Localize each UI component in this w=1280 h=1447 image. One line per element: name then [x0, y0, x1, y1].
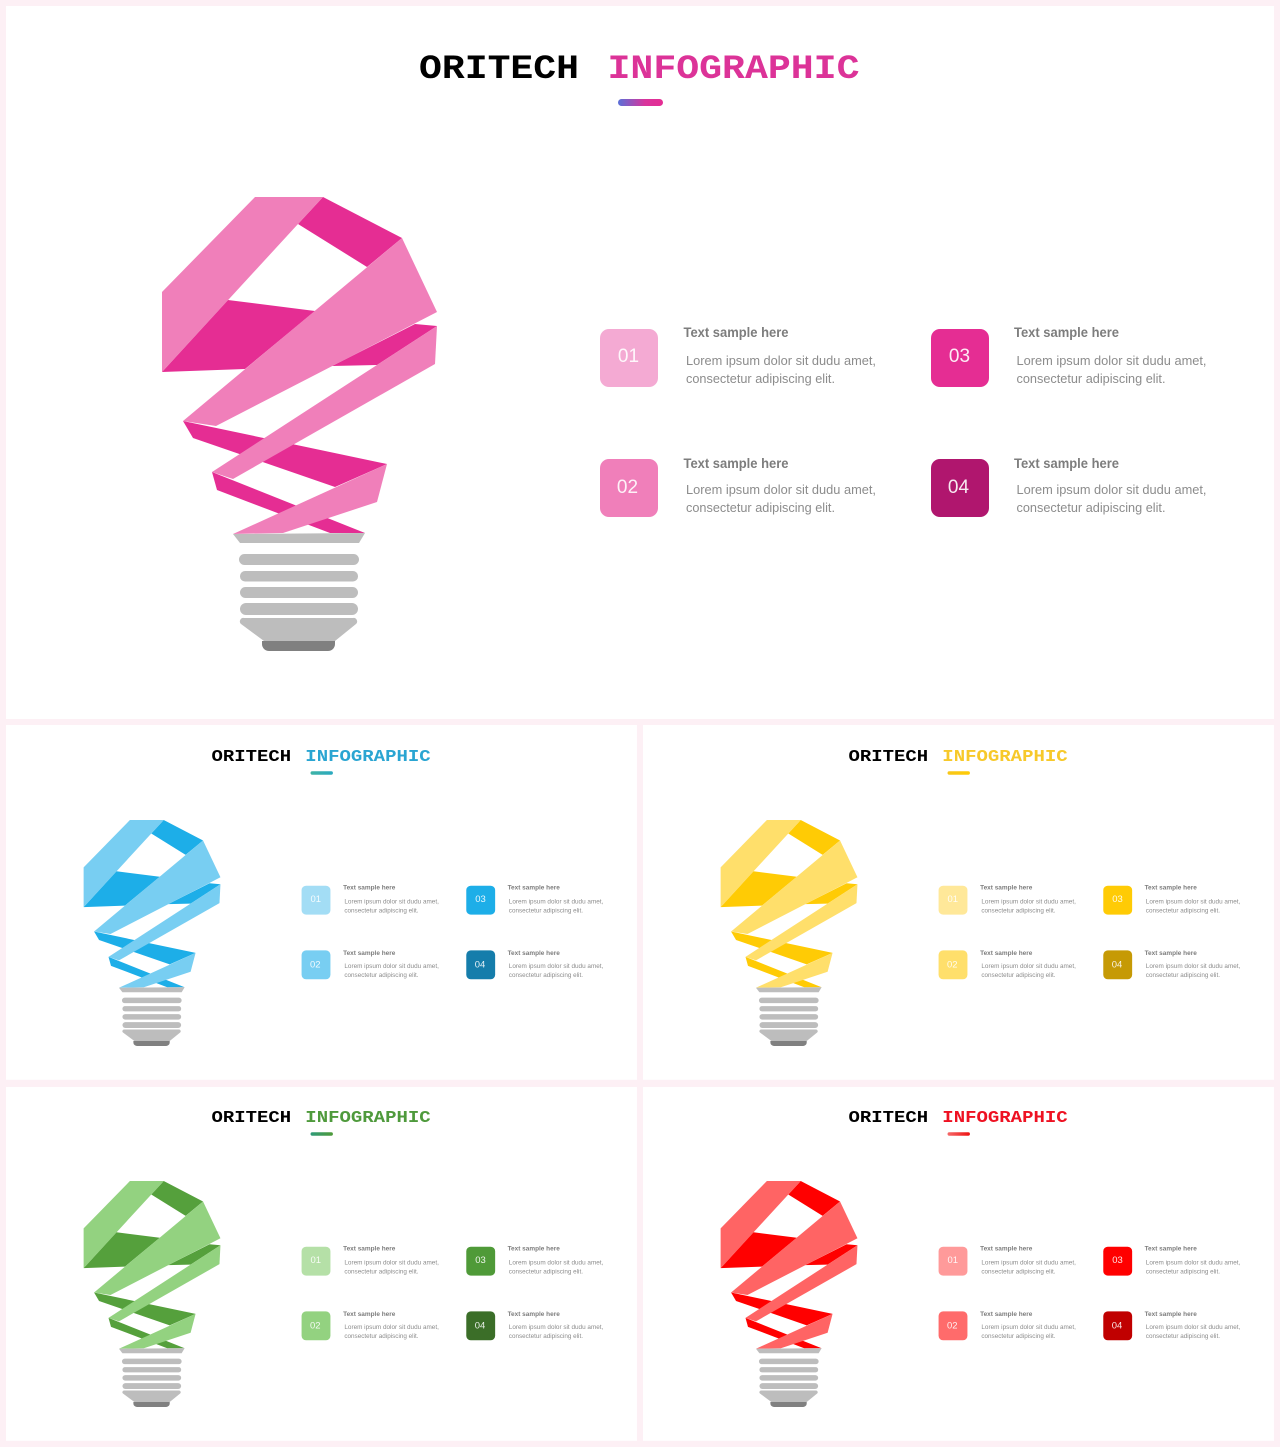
title underline	[948, 771, 970, 775]
item 02	[302, 1311, 439, 1340]
item 04: Text sample here	[1014, 456, 1119, 471]
item 04	[466, 950, 604, 979]
item 01: 01	[948, 1255, 958, 1266]
item 03: 03	[1112, 1255, 1123, 1266]
item 02: Text sample here	[980, 950, 1033, 957]
item 04: Text sample here	[508, 1311, 560, 1318]
title: INFOGRAPHIC	[305, 1109, 431, 1128]
panel: blue infographic	[6, 725, 637, 1080]
item 03: Text sample here	[1145, 885, 1197, 892]
item 02: consectetur adipiscing elit.	[344, 1333, 419, 1340]
icon: ribbon light bulb	[84, 820, 220, 1046]
item 03	[466, 885, 604, 915]
item 03: Text sample here	[508, 1246, 560, 1253]
item 02: Lorem ipsum dolor sit dudu amet,	[344, 963, 439, 970]
item 01	[302, 1246, 439, 1276]
title underline	[948, 1132, 970, 1136]
item 02: Text sample here	[343, 950, 396, 957]
item 02: 02	[617, 477, 638, 498]
item 02: 02	[310, 1320, 321, 1331]
bulb screw base	[233, 533, 365, 651]
bulb glass ribbon	[721, 1181, 857, 1349]
item 03: Text sample here	[1014, 325, 1119, 340]
bulb glass ribbon	[84, 1181, 220, 1349]
item 04	[1103, 1311, 1241, 1340]
item 02: Text sample here	[980, 1311, 1033, 1318]
item 01: Text sample here	[980, 885, 1033, 892]
item 04: Lorem ipsum dolor sit dudu amet,	[509, 1324, 604, 1331]
item 03	[466, 1246, 604, 1276]
item 02	[600, 456, 876, 517]
icon: ribbon light bulb	[721, 820, 857, 1046]
bulb glass ribbon	[162, 197, 437, 534]
item 01	[939, 885, 1076, 915]
title underline	[618, 99, 663, 106]
item 01: Text sample here	[343, 1246, 396, 1253]
item 02: Text sample here	[343, 1311, 396, 1318]
item 01: Lorem ipsum dolor sit dudu amet,	[981, 899, 1076, 906]
title: ORITECH	[849, 1109, 928, 1128]
item 04: Lorem ipsum dolor sit dudu amet,	[1146, 1324, 1241, 1331]
panel: red infographic	[643, 1087, 1274, 1441]
item 01: 01	[311, 1255, 321, 1266]
item 01: 01	[618, 346, 639, 367]
item 04: consectetur adipiscing elit.	[1146, 1333, 1220, 1340]
item 01: Text sample here	[343, 885, 396, 892]
item 03: 03	[1112, 894, 1123, 905]
item 03: 03	[949, 346, 970, 367]
item 03	[1103, 885, 1241, 915]
item 02	[939, 1311, 1076, 1340]
item 01: consectetur adipiscing elit.	[344, 908, 419, 915]
title: INFOGRAPHIC	[942, 1109, 1068, 1128]
title: ORITECH	[212, 748, 291, 767]
item 02: Text sample here	[684, 456, 789, 471]
item 03: consectetur adipiscing elit.	[1016, 371, 1166, 386]
item 01	[302, 885, 439, 915]
item 03: Lorem ipsum dolor sit dudu amet,	[509, 899, 604, 906]
item 02: 02	[310, 959, 321, 970]
item 02: consectetur adipiscing elit.	[981, 972, 1056, 979]
item 01: Lorem ipsum dolor sit dudu amet,	[981, 1260, 1076, 1267]
item 03: consectetur adipiscing elit.	[509, 908, 583, 915]
item 03: Lorem ipsum dolor sit dudu amet,	[509, 1260, 604, 1267]
item 02: Lorem ipsum dolor sit dudu amet,	[981, 1324, 1076, 1331]
title	[849, 748, 1068, 767]
item 04: Lorem ipsum dolor sit dudu amet,	[509, 963, 604, 970]
icon: ribbon light bulb	[721, 1181, 857, 1407]
item 03: Text sample here	[508, 885, 560, 892]
item 01: Lorem ipsum dolor sit dudu amet,	[344, 899, 439, 906]
title	[419, 51, 860, 89]
item 03	[931, 325, 1206, 387]
bulb screw base	[119, 987, 185, 1046]
title	[212, 748, 431, 767]
item 03: Lorem ipsum dolor sit dudu amet,	[1146, 1260, 1241, 1267]
title: ORITECH	[212, 1109, 291, 1128]
title: INFOGRAPHIC	[305, 748, 431, 767]
item 01: Text sample here	[980, 1246, 1033, 1253]
panel: yellow infographic	[643, 725, 1274, 1080]
item 02	[302, 950, 439, 979]
panel: green infographic	[6, 1087, 637, 1441]
item 04: 04	[475, 959, 485, 970]
item 02: 02	[947, 1320, 958, 1331]
title: ORITECH	[419, 51, 579, 89]
title	[212, 1109, 431, 1128]
item 04: consectetur adipiscing elit.	[1016, 500, 1166, 515]
item 03: 03	[475, 894, 486, 905]
item 02	[939, 950, 1076, 979]
item 01: Lorem ipsum dolor sit dudu amet,	[686, 353, 876, 368]
item 03: Lorem ipsum dolor sit dudu amet,	[1146, 899, 1241, 906]
item 03: 03	[475, 1255, 486, 1266]
item 04: Lorem ipsum dolor sit dudu amet,	[1146, 963, 1241, 970]
title: ORITECH	[849, 748, 928, 767]
item 02: consectetur adipiscing elit.	[981, 1333, 1056, 1340]
item 04: Text sample here	[508, 950, 560, 957]
item 01: 01	[948, 894, 958, 905]
item 03: consectetur adipiscing elit.	[1146, 908, 1220, 915]
item 04: 04	[1112, 959, 1122, 970]
bulb glass ribbon	[721, 820, 857, 988]
item 04: 04	[1112, 1320, 1122, 1331]
item 01: Text sample here	[684, 325, 789, 340]
item 04: Lorem ipsum dolor sit dudu amet,	[1016, 482, 1206, 497]
item 01	[600, 325, 876, 387]
title: INFOGRAPHIC	[608, 51, 860, 89]
item 01: Lorem ipsum dolor sit dudu amet,	[344, 1260, 439, 1267]
item 01: consectetur adipiscing elit.	[686, 371, 835, 386]
item 04: 04	[948, 477, 969, 498]
item 01: consectetur adipiscing elit.	[981, 908, 1056, 915]
item 01: consectetur adipiscing elit.	[981, 1269, 1056, 1276]
icon: ribbon light bulb	[162, 197, 437, 651]
item 04: Text sample here	[1145, 950, 1197, 957]
item 02: Lorem ipsum dolor sit dudu amet,	[686, 482, 876, 497]
item 04	[466, 1311, 604, 1340]
item 04	[931, 456, 1206, 517]
title	[849, 1109, 1068, 1128]
title: INFOGRAPHIC	[942, 748, 1068, 767]
bulb screw base	[756, 987, 822, 1046]
panel: pink infographic	[6, 6, 1274, 719]
item 02: 02	[947, 959, 958, 970]
bulb glass ribbon	[84, 820, 220, 988]
icon: ribbon light bulb	[84, 1181, 220, 1407]
title underline	[311, 771, 333, 775]
item 04: 04	[475, 1320, 485, 1331]
item 01	[939, 1246, 1076, 1276]
item 04: consectetur adipiscing elit.	[509, 972, 583, 979]
item 04: Text sample here	[1145, 1311, 1197, 1318]
item 01: 01	[311, 894, 321, 905]
item 04: consectetur adipiscing elit.	[509, 1333, 583, 1340]
item 03: consectetur adipiscing elit.	[1146, 1269, 1220, 1276]
item 03: consectetur adipiscing elit.	[509, 1269, 583, 1276]
bulb screw base	[756, 1348, 822, 1407]
item 04	[1103, 950, 1241, 979]
item 01: consectetur adipiscing elit.	[344, 1269, 419, 1276]
item 02: Lorem ipsum dolor sit dudu amet,	[981, 963, 1076, 970]
bulb screw base	[119, 1348, 185, 1407]
item 02: Lorem ipsum dolor sit dudu amet,	[344, 1324, 439, 1331]
item 03: Text sample here	[1145, 1246, 1197, 1253]
item 04: consectetur adipiscing elit.	[1146, 972, 1220, 979]
item 02: consectetur adipiscing elit.	[344, 972, 419, 979]
item 03: Lorem ipsum dolor sit dudu amet,	[1016, 353, 1206, 368]
item 03	[1103, 1246, 1241, 1276]
title underline	[311, 1132, 333, 1136]
item 02: consectetur adipiscing elit.	[686, 500, 835, 515]
